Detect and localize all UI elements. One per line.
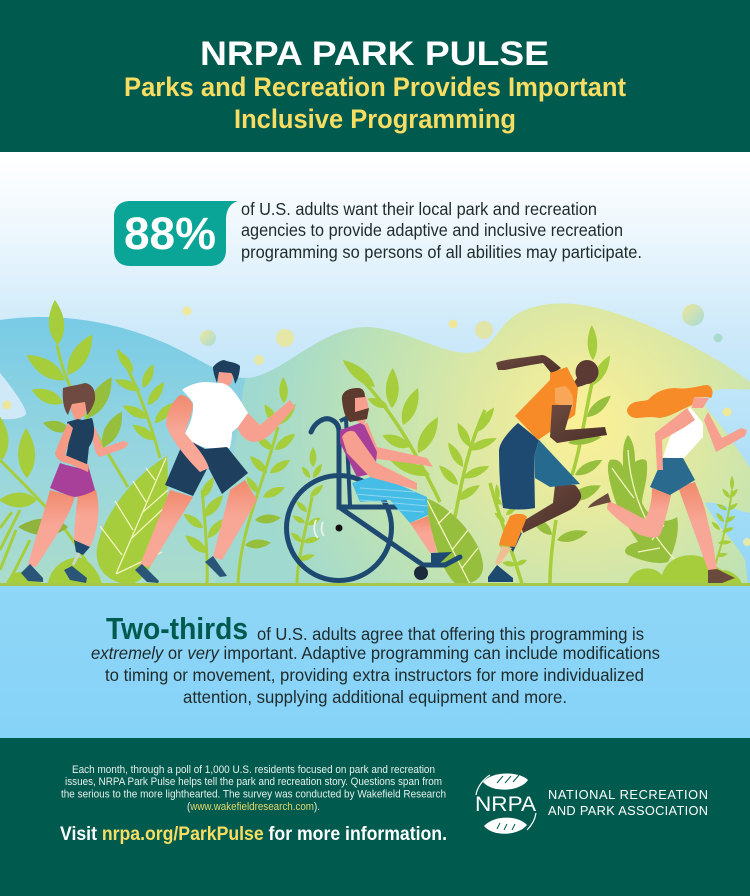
figure: man in white shirt	[135, 360, 295, 583]
organisation name: AND PARK ASSOCIATION	[548, 803, 708, 818]
NRPA logo: NRPA	[475, 793, 536, 816]
footer band	[0, 738, 750, 896]
plants: right	[608, 435, 739, 565]
wheelchair	[286, 418, 460, 580]
organisation name: NATIONAL RECREATION	[548, 787, 708, 802]
badge	[114, 201, 238, 266]
organisation name	[548, 787, 708, 818]
footer about text: (www.wakefieldresearch.com).	[187, 801, 320, 813]
illustration: people of all abilities exercising in a park	[0, 299, 750, 586]
callout: 88 percent stat	[114, 199, 642, 266]
footer call to action: Visit nrpa.org/ParkPulse for more information.	[60, 824, 447, 845]
footer about text	[61, 764, 446, 813]
two-thirds heading: Two-thirds	[106, 611, 248, 646]
ground bushes	[6, 555, 742, 584]
figure: man in wheelchair	[286, 388, 460, 580]
figure: runner in orange shirt	[488, 355, 607, 582]
plants: left	[0, 299, 177, 584]
two-thirds body: extremely or very important. Adaptive programming can include modifications	[91, 643, 660, 663]
two-thirds body: to timing or movement, providing extra instructors for more individualized	[105, 665, 644, 685]
two-thirds body: attention, supplying additional equipment and more.	[183, 687, 567, 707]
figure: woman with red hair	[588, 385, 747, 583]
figure: woman with prosthetic leg	[21, 383, 129, 583]
floating dots	[2, 304, 750, 546]
header band	[0, 0, 750, 152]
badge: 88%	[124, 208, 216, 259]
plants: centre left	[181, 377, 325, 584]
subtitle	[124, 72, 626, 134]
title: NRPA PARK PULSE	[200, 35, 549, 73]
stat description	[241, 199, 642, 262]
plants: centre right	[339, 325, 614, 584]
stat description: of U.S. adults want their local park and recreation	[241, 199, 597, 219]
footer about text: the serious to the more lighthearted. The survey was conducted by Wakefield Research	[61, 788, 446, 800]
panel: two-thirds stat	[0, 586, 750, 738]
stat description: programming so persons of all abilities may participate.	[241, 242, 642, 262]
two-thirds body	[91, 624, 660, 707]
NRPA logo	[475, 773, 708, 834]
subtitle: Parks and Recreation Provides Important	[124, 72, 626, 102]
ground line	[0, 583, 750, 586]
hills	[0, 303, 750, 584]
page background	[0, 152, 750, 592]
stat description: agencies to provide adaptive and inclusive recreation	[241, 220, 623, 240]
footer about text: issues, NRPA Park Pulse helps tell the park and recreation story. Questions span from	[65, 776, 442, 788]
plant: large veined leaf	[97, 456, 168, 584]
two-thirds body: of U.S. adults agree that offering this programming is	[257, 624, 644, 644]
subtitle: Inclusive Programming	[234, 104, 516, 134]
footer about text: Each month, through a poll of 1,000 U.S. residents focused on park and recreation	[72, 764, 435, 776]
